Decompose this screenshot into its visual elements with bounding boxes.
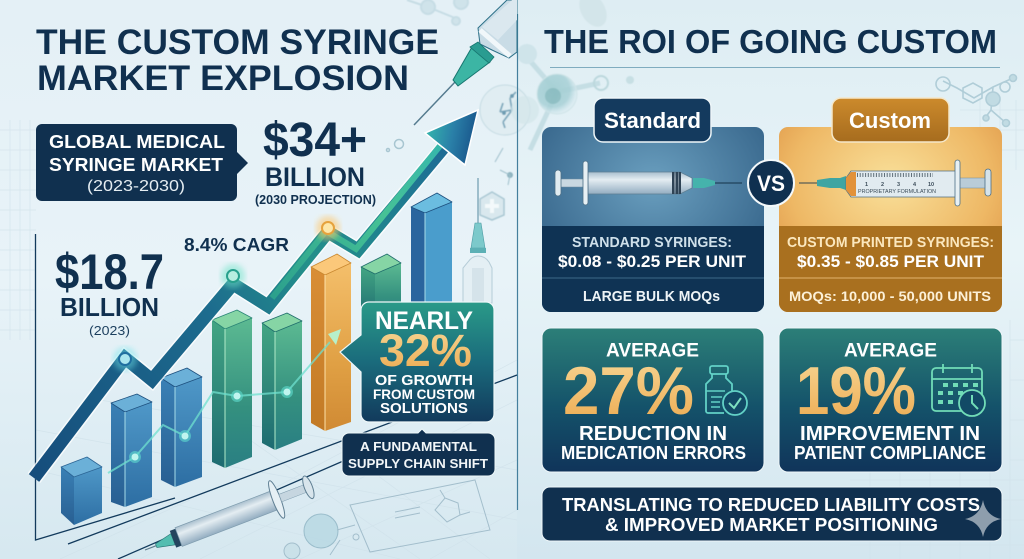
title left: THE CUSTOM SYRINGE	[36, 23, 439, 62]
supply chain note: SUPPLY CHAIN SHIFT	[348, 456, 488, 471]
stat panel: patient compliance: 19%	[796, 353, 916, 429]
custom syringe: 2	[881, 182, 884, 188]
icon: sparkle	[965, 500, 1001, 537]
stat panel: patient compliance	[779, 328, 1002, 472]
panel: custom	[779, 98, 1002, 312]
bottom banner: TRANSLATING TO REDUCED LIABILITY COSTS	[562, 494, 980, 515]
inner growth line with nodes	[108, 329, 341, 473]
market label box: (2023-2030)	[87, 178, 185, 195]
stat: $18.7 billion: BILLION	[60, 292, 159, 322]
bubbles	[386, 140, 404, 152]
stat panel: medication errors: AVERAGE	[606, 340, 699, 362]
custom syringe: PROPRIETARY FORMULATION	[858, 189, 936, 195]
panel: standard	[542, 98, 764, 312]
custom pricing: CUSTOM PRINTED SYRINGES:	[787, 234, 994, 251]
custom syringe: 1	[865, 182, 868, 188]
custom syringe: 10	[928, 182, 934, 188]
bar chart	[61, 193, 452, 525]
bar 5	[262, 313, 302, 450]
stat panel: patient compliance: AVERAGE	[844, 340, 937, 362]
CAGR label: 8.4% CAGR	[184, 234, 289, 255]
background right	[517, 0, 1024, 559]
bar 1	[61, 457, 102, 525]
top syringe	[414, 0, 517, 125]
title left	[36, 23, 439, 98]
stat panel: medication errors: 27%	[563, 353, 694, 429]
supply chain note: A FUNDAMENTAL	[360, 439, 477, 454]
market label box: GLOBAL MEDICAL	[49, 132, 225, 152]
stat: $34+ billion: BILLION	[265, 162, 365, 192]
stat panel: medication errors: MEDICATION ERRORS	[561, 442, 746, 463]
standard label	[594, 98, 711, 142]
bar 4	[212, 310, 252, 468]
title left: MARKET EXPLOSION	[37, 59, 409, 98]
schematic sketch	[284, 480, 490, 559]
custom label: Custom	[849, 108, 931, 133]
bar 2	[111, 394, 152, 507]
divider	[516, 14, 518, 510]
standard syringe	[555, 161, 742, 205]
standard pricing: STANDARD SYRINGES:	[572, 234, 732, 251]
bottom banner: & IMPROVED MARKET POSITIONING	[605, 514, 938, 535]
icon: medicine bottle	[706, 366, 747, 415]
icon: calendar with clock	[932, 364, 985, 416]
custom pricing: $0.35 - $0.85 PER UNIT	[797, 252, 985, 271]
stat panel: patient compliance: IMPROVEMENT IN	[800, 423, 980, 445]
market label box: SYRINGE MARKET	[49, 155, 223, 175]
molecule right	[936, 74, 1016, 126]
bar 8	[411, 193, 452, 310]
vs badge	[748, 160, 794, 206]
standard pricing: $0.08 - $0.25 PER UNIT	[558, 252, 747, 271]
bar 3	[161, 368, 202, 487]
standard pricing: LARGE BULK MOQs	[583, 288, 720, 305]
market label box	[36, 124, 248, 201]
stat: $18.7 billion	[55, 244, 164, 338]
standard label: Standard	[604, 108, 701, 133]
callout: 32% of growth: SOLUTIONS	[380, 401, 468, 417]
bar 6 orange	[311, 254, 351, 431]
bar 7	[361, 254, 401, 320]
chart nodes	[113, 216, 340, 371]
stat panel: medication errors: REDUCTION IN	[579, 423, 727, 445]
stat: $34+ billion: $34+	[263, 114, 367, 167]
supply chain note	[342, 429, 495, 476]
custom syringe: 4	[913, 182, 917, 188]
callout: 32% of growth: NEARLY	[375, 307, 473, 335]
stat: $18.7 billion: $18.7	[55, 244, 164, 300]
title right: THE ROI OF GOING CUSTOM	[544, 24, 997, 61]
growth arrow	[34, 110, 478, 478]
callout: 32% of growth: FROM CUSTOM	[373, 386, 475, 402]
stat panel: medication errors	[542, 328, 764, 472]
bottom banner	[542, 487, 1002, 541]
callout: 32% of growth: OF GROWTH	[375, 373, 473, 389]
callout: 32% of growth: 32%	[379, 325, 472, 376]
small syringe vial	[463, 178, 492, 303]
stat: $18.7 billion: (2023)	[89, 323, 130, 338]
custom pricing	[787, 234, 994, 304]
custom syringe	[799, 160, 991, 206]
stat: $34+ billion	[255, 114, 376, 207]
vs badge: VS	[757, 171, 785, 196]
custom pricing: MOQs: 10,000 - 50,000 UNITS	[789, 288, 991, 304]
background molecule cluster beside divider	[480, 0, 634, 220]
callout: 32% of growth	[340, 302, 494, 422]
background molecules top	[407, 0, 468, 25]
chart axes	[36, 234, 517, 559]
stat panel: patient compliance: PATIENT COMPLIANCE	[794, 442, 986, 463]
background left	[0, 0, 517, 559]
standard pricing	[558, 234, 747, 305]
custom syringe: 3	[897, 182, 900, 188]
custom label	[832, 98, 949, 142]
bottom syringe	[138, 467, 319, 559]
stat: $34+ billion: (2030 PROJECTION)	[255, 193, 376, 207]
